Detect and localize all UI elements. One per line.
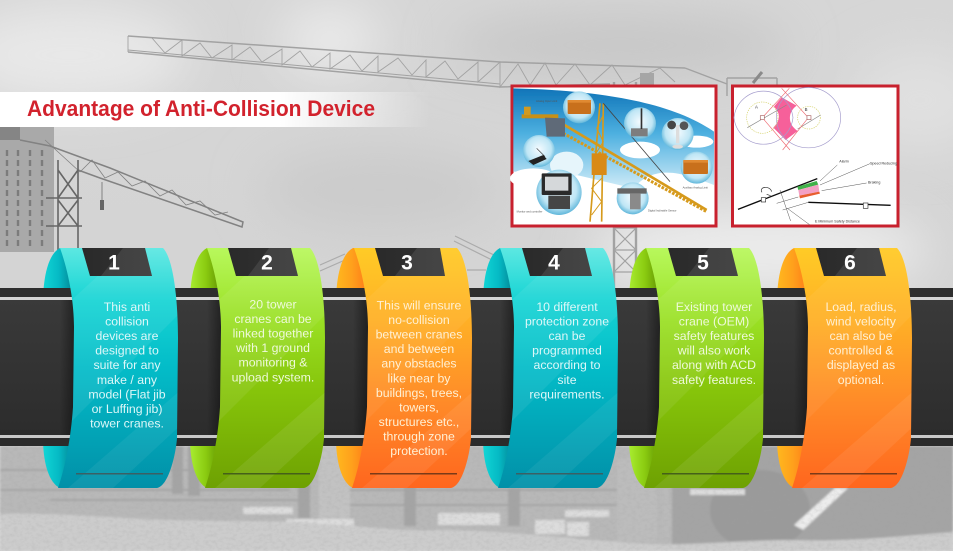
card 2 text: 20 tower (249, 298, 297, 312)
card 4 text: can be (549, 329, 586, 343)
photo panel: crane with anti-collision devices: Analog Input Limit (536, 99, 558, 103)
card 6 text: optional. (838, 373, 884, 387)
number 4: 4 (548, 252, 560, 274)
card 3 text: any obstacles (381, 357, 457, 371)
card 1 text: tower cranes. (90, 416, 164, 430)
card 1 text: suite for any (94, 358, 161, 372)
background: left building and crane (0, 127, 243, 252)
card 3 text: through zone (383, 429, 455, 443)
card 1 text: devices are (96, 329, 159, 343)
card 1 text: or Luffing jib) (92, 402, 162, 416)
dark horizontal band (0, 288, 953, 446)
number 2: 2 (261, 252, 273, 274)
card 5 text: safety features (674, 329, 754, 343)
card 3 text: like near by (388, 371, 451, 385)
card 4 text: 10 different (536, 300, 598, 314)
photo panel: crane with anti-collision devices (510, 86, 716, 226)
number 5: 5 (697, 252, 709, 274)
card 5 (644, 248, 769, 488)
card 1 (58, 248, 183, 488)
card 5 text: Existing tower (676, 300, 752, 314)
title banner (0, 92, 430, 127)
card 5 text: will also work (677, 344, 751, 358)
card 1 text: This anti (104, 300, 150, 314)
diagram panel: protection zones: A (755, 104, 758, 109)
card 3 text: structures etc., (379, 415, 459, 429)
card 1 text: designed to (95, 344, 159, 358)
card 5 text: along with ACD (672, 358, 756, 372)
card 6 text: can also be (830, 329, 893, 343)
number 3: 3 (401, 252, 413, 274)
diagram panel: protection zones: B (805, 107, 808, 112)
card 2 text: monitoring & (238, 356, 308, 370)
card 2 text: linked together (233, 327, 313, 341)
card 6 text: Load, radius, (825, 300, 897, 314)
card 3 (352, 248, 477, 488)
card 4 text: according to (534, 358, 601, 372)
photo panel: crane with anti-collision devices: Monitor and controller (517, 209, 542, 213)
card 3 text: This will ensure (377, 298, 462, 312)
card 1 text: model (Flat jib (88, 387, 166, 401)
title: Advantage of Anti-Collision Device (27, 96, 375, 121)
card 1 text: collision (105, 315, 149, 329)
background: construction site and ground (0, 446, 953, 551)
card 4 (498, 248, 623, 488)
card 6 text: wind velocity (825, 315, 897, 329)
number 1: 1 (108, 252, 120, 274)
background: upper tower crane (128, 36, 777, 292)
card 3 text: towers, (399, 400, 439, 414)
card 6 (792, 248, 917, 488)
number 6: 6 (844, 252, 856, 274)
card 4 text: protection zone (525, 315, 609, 329)
card 3 text: no-collision (388, 313, 450, 327)
card 6 text: displayed as (827, 358, 895, 372)
card 3 text: protection. (390, 444, 448, 458)
photo panel: crane with anti-collision devices: Digital Inclinable Sensor (648, 208, 677, 212)
diagram panel: protection zones: E Minimum Safety Distance (815, 220, 860, 224)
diagram panel: protection zones: Alarm (839, 160, 849, 164)
card 1 text: make / any (97, 373, 158, 387)
card 3 text: buildings, trees, (376, 386, 462, 400)
background: distant crane jibs (320, 236, 500, 271)
diagram panel: protection zones (732, 86, 898, 226)
card 2 text: cranes can be (234, 312, 312, 326)
diagram panel: protection zones: Speed Reducing (870, 162, 897, 166)
card 4 text: requirements. (529, 387, 605, 401)
card 5 text: crane (OEM) (679, 315, 749, 329)
ribbon back folds (43, 248, 817, 488)
photo panel: crane with anti-collision devices: Auxiliary Analog Limit (683, 185, 708, 189)
card 4 text: programmed (532, 344, 602, 358)
card 2 text: upload system. (232, 370, 314, 384)
diagram panel: protection zones: Braking (868, 180, 880, 184)
card 6 text: controlled & (829, 344, 894, 358)
card 2 (205, 248, 330, 488)
card 4 text: site (557, 373, 577, 387)
card 5 text: safety features. (672, 373, 756, 387)
card 3 text: and between (384, 342, 454, 356)
card 2 text: with 1 ground (235, 341, 310, 355)
card 3 text: between cranes (376, 328, 462, 342)
